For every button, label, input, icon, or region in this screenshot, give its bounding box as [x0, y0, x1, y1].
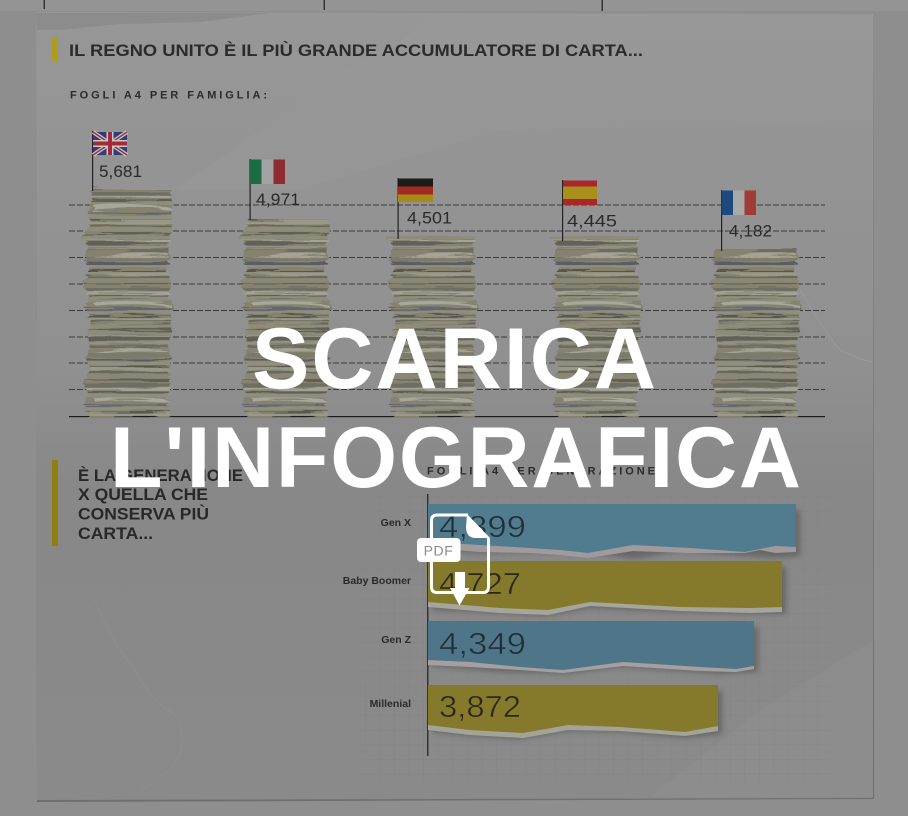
- bar: Baby Boomer: [343, 561, 786, 616]
- subheading: sheets per generation: FOGLI A4 PER GENERAZIONE: [427, 466, 655, 478]
- arrow: download: [450, 572, 470, 606]
- chart: sheets per generation bars: [343, 494, 800, 756]
- icon: PDF file download: [417, 514, 490, 606]
- bar: Gen Z: 4,349: [439, 626, 526, 661]
- stack: Spain: [549, 236, 643, 418]
- bar: Millenial: Millenial: [370, 698, 411, 710]
- flag and value: Spain: [562, 180, 617, 241]
- flag and value: Germany: [398, 178, 452, 239]
- overlay title: download the infographic: SCARICA: [252, 311, 656, 407]
- text block: generation X callout: X QUELLA CHE: [78, 485, 208, 504]
- bar: Millenial: 3,872: [439, 689, 521, 724]
- bar: Gen X: Gen X: [381, 517, 411, 529]
- chart: paper stacks per household: [69, 131, 825, 417]
- flag and value: Italy: 4,971: [256, 190, 300, 209]
- flag and value: Italy: [250, 159, 300, 220]
- text block: generation X callout: CONSERVA PIÙ: [78, 504, 209, 524]
- bar: Baby Boomer: Baby Boomer: [343, 575, 411, 587]
- bar: Baby Boomer: 4,727: [439, 566, 521, 601]
- flag and value: Spain: 4,445: [567, 212, 617, 230]
- badge: PDF label: PDF: [424, 542, 453, 558]
- stack: Germany: [385, 236, 479, 418]
- bar: Millenial: [370, 685, 722, 739]
- overlay title: download the infographic: L'INFOGRAFICA: [110, 410, 801, 506]
- text block: generation X callout: È LA GENERAZIONE: [78, 466, 243, 485]
- flag and value: United Kingdom: [92, 131, 142, 191]
- heading: top chart title: IL REGNO UNITO È IL PIÙ GRANDE ACCUMULATORE DI CARTA...: [69, 41, 643, 60]
- flag and value: United Kingdom: 5,681: [99, 162, 142, 181]
- overlay title: download the infographic: [110, 311, 801, 506]
- subheading: sheets per household: FOGLI A4 PER FAMIGLIA:: [70, 90, 267, 102]
- flag and value: France: 4,182: [729, 222, 772, 240]
- bar: Gen X: [381, 504, 800, 559]
- flag and value: France: [721, 190, 772, 251]
- stack: Italy: [238, 219, 332, 418]
- bar: Gen Z: [381, 621, 758, 674]
- bar: Gen Z: Gen Z: [381, 634, 412, 646]
- bar: Gen X: 4,899: [439, 509, 526, 544]
- flag and value: Germany: 4,501: [407, 208, 452, 228]
- text block: generation X callout: CARTA...: [78, 524, 153, 543]
- stack: France: [710, 248, 802, 418]
- stack: United Kingdom: [80, 188, 174, 417]
- text block: generation X callout: [52, 460, 243, 546]
